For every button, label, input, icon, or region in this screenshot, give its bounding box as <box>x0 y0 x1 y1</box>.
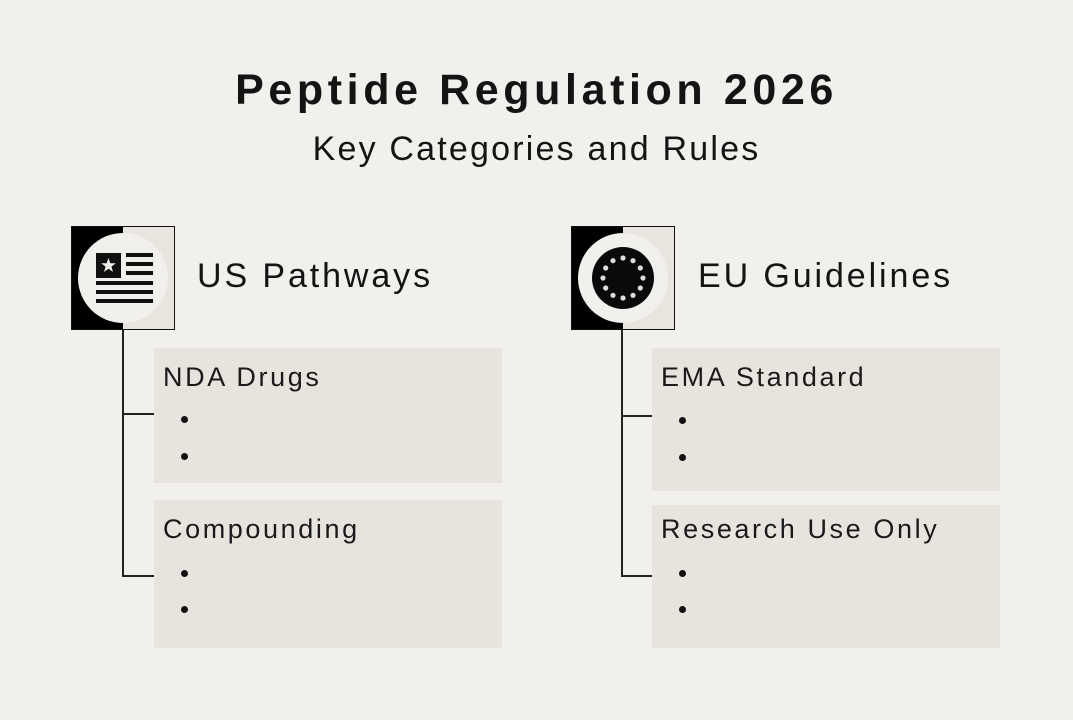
icon: US flag <box>71 226 175 330</box>
panel: Research Use Only: Research Use Only <box>661 514 939 544</box>
panel: Compounding <box>154 500 502 648</box>
panel: EMA Standard <box>652 348 1000 491</box>
panel: NDA Drugs <box>154 348 502 483</box>
panel: Compounding: Compounding <box>163 514 360 544</box>
subtitle: Key Categories and Rules <box>313 130 760 168</box>
heading: US Pathways: US Pathways <box>197 257 433 295</box>
heading: EU Guidelines: EU Guidelines <box>698 257 953 295</box>
panel: EMA Standard: EMA Standard <box>661 362 866 392</box>
connector: US <box>122 330 154 577</box>
icon: EU flag <box>571 226 675 330</box>
panel: NDA Drugs: NDA Drugs <box>163 362 321 392</box>
connector: EU <box>621 330 652 577</box>
title: Peptide Regulation 2026 <box>235 66 838 114</box>
panel: Research Use Only <box>652 505 1000 648</box>
